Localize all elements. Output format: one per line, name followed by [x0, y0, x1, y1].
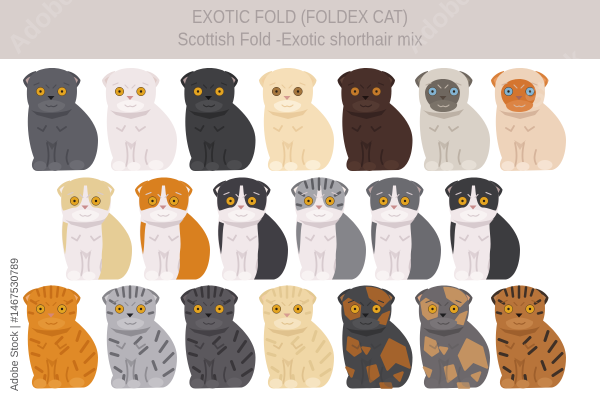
cat: cream bicolor [57, 178, 132, 280]
cat row 1: coat varieties [23, 68, 566, 171]
watermark: Stock [518, 43, 590, 114]
cat: blue [23, 68, 98, 171]
cat: red tabby [23, 286, 98, 388]
cat: lilac [102, 68, 177, 171]
cat: black smoke bicolor [213, 178, 288, 280]
cat: blue bicolor [366, 178, 441, 280]
cat: silver tabby [102, 286, 177, 388]
cat: seal point [415, 68, 490, 171]
title: EXOTIC FOLD (FOLDEX CAT) [192, 7, 408, 27]
cat: black bicolor [445, 178, 520, 280]
cat row 2: bicolor varieties [57, 178, 520, 280]
cat: cream tabby [259, 286, 334, 388]
cat: silver tabby bicolor [291, 178, 366, 280]
header band [0, 0, 600, 59]
cat: black [180, 68, 256, 171]
subtitle: Scottish Fold -Exotic shorthair mix [178, 30, 422, 50]
watermark [1, 0, 590, 114]
cat: black tabby [180, 286, 256, 388]
cat: cream [259, 68, 334, 171]
cat: red bicolor [135, 178, 210, 280]
cat: dilute tortoiseshell [415, 286, 490, 388]
cat: brown tortie tabby [491, 286, 566, 388]
cat: flame point [491, 68, 566, 171]
cat: dark tortoiseshell [338, 286, 412, 388]
stock credit: Adobe Stock | #1467530789 [9, 258, 21, 391]
cat row 3: tabby and tortie varieties [23, 286, 566, 388]
cat: chocolate [338, 68, 412, 171]
